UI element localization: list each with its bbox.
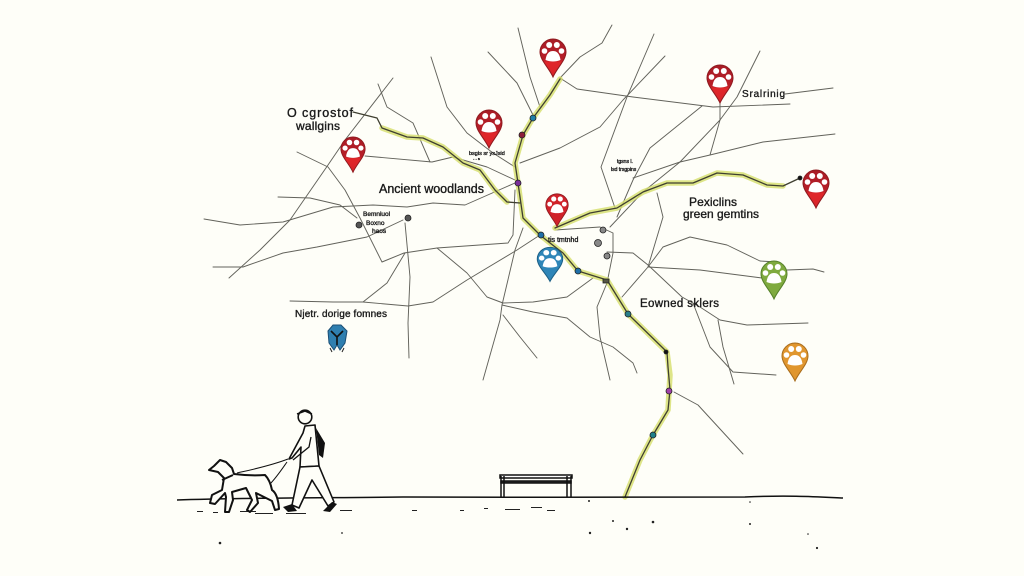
pin: green: [761, 261, 787, 299]
label: lower left: Njetr. dorige fomnes: [295, 309, 387, 320]
icon: blue figure: [328, 325, 347, 352]
small label: centre: tis tmtnhd: [548, 237, 578, 244]
small label: oval left: Bemniuol: [363, 211, 391, 218]
trail waypoints: [356, 115, 802, 438]
label: ancient woodlands: Ancient woodlands: [379, 182, 484, 196]
person walking: [283, 410, 337, 512]
pin: orange: [782, 343, 808, 381]
pin: red top: [540, 39, 566, 77]
ground line: [177, 496, 843, 500]
label: top right: Sralrinig: [742, 89, 785, 100]
pin: red upper centre: [476, 110, 502, 148]
small label: centre right: tgsns l.: [617, 159, 633, 165]
label: right: Pexiclins: [689, 195, 737, 209]
small label: upper centre: bsgis sr ysJsid: [469, 151, 505, 157]
pin: blue: [537, 247, 563, 282]
small label: centre right: [611, 159, 637, 173]
label: right line 2: green gemtins: [683, 207, 759, 221]
ground specks: [197, 500, 818, 549]
label: top left line 2: wallgins: [295, 119, 340, 133]
bench: [500, 475, 572, 497]
pin: red centre: [546, 194, 568, 226]
dark trail line: [353, 79, 800, 497]
path network: thin grey streets: [204, 25, 835, 454]
dog collar: [222, 475, 233, 480]
small label: upper centre: [469, 151, 505, 161]
label: top left: O cgrostof: [287, 106, 354, 120]
pin: red top right: [707, 65, 733, 103]
pin: red right: [803, 170, 829, 208]
dog: [209, 460, 279, 512]
pin: red left: [341, 137, 365, 172]
small label: centre right: lsd trsgpins: [611, 167, 637, 173]
green trail highlight: [382, 79, 783, 497]
small label: oval left: [363, 211, 391, 235]
small label: oval left: haos: [372, 228, 387, 235]
small label: upper centre: - - s: [473, 156, 480, 161]
label: lower right: Eowned sklers: [640, 298, 719, 310]
leash: [237, 459, 288, 484]
small label: oval left: Boxno: [366, 220, 385, 227]
